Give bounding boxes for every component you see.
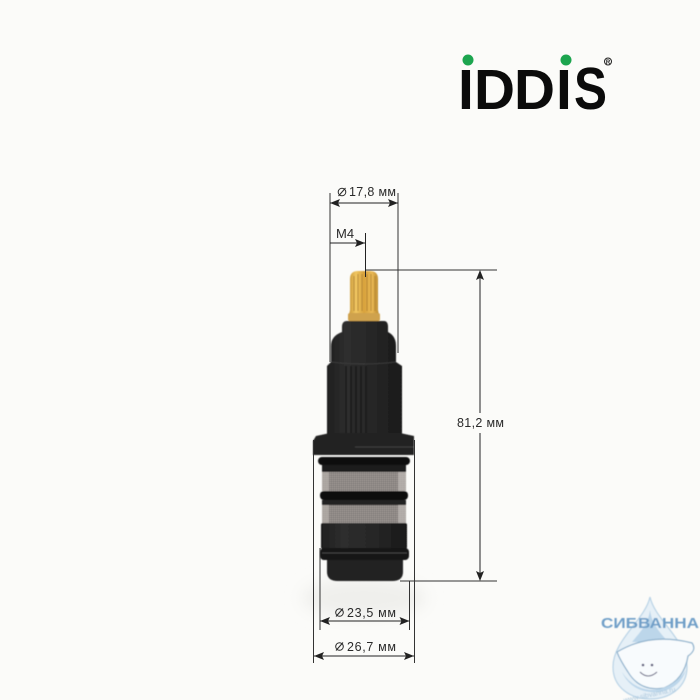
dimension: height 81,2 mm: 81,2 мм <box>457 416 504 430</box>
dimension: height 81,2 mm <box>366 270 504 581</box>
watermark: Sibvanna logo: СИБВАННА <box>601 616 700 632</box>
logo: IDDIS: D <box>514 58 555 122</box>
logo: IDDIS: I <box>556 58 572 122</box>
black upper body <box>327 321 402 434</box>
dimension: diameter 17,8 mm <box>330 185 398 362</box>
dimension: M4 <box>330 226 366 277</box>
logo: IDDIS: R <box>606 60 611 66</box>
dimension: diameter 26,7 mm <box>314 440 414 663</box>
logo: IDDIS: D <box>474 58 515 122</box>
base <box>327 560 403 581</box>
flange <box>313 433 414 455</box>
brass spline stem <box>348 271 380 321</box>
logo: IDDIS: S <box>574 56 607 122</box>
watermark: Sibvanna logo <box>601 597 700 700</box>
dimension: diameter 17,8 mm: 17,8 мм <box>349 185 396 199</box>
logo: IDDIS <box>458 54 612 122</box>
floor shadow <box>302 578 426 618</box>
thermostatic cartridge <box>313 271 414 581</box>
dimension: diameter 23,5 mm: 23,5 мм <box>347 606 396 620</box>
mesh band 2 <box>322 505 406 524</box>
dimension: diameter 23,5 mm <box>320 548 410 630</box>
ring 2 <box>320 491 408 500</box>
dimension: diameter 26,7 mm: 26,7 мм <box>347 640 396 654</box>
ring 3 <box>320 548 409 560</box>
lower black band <box>321 523 407 549</box>
dimension: M4: M4 <box>336 226 354 241</box>
logo: IDDIS: I <box>458 58 474 122</box>
mesh band 1 <box>322 472 406 491</box>
icon: water drop with bath <box>613 597 694 699</box>
ring 1 <box>318 457 410 465</box>
